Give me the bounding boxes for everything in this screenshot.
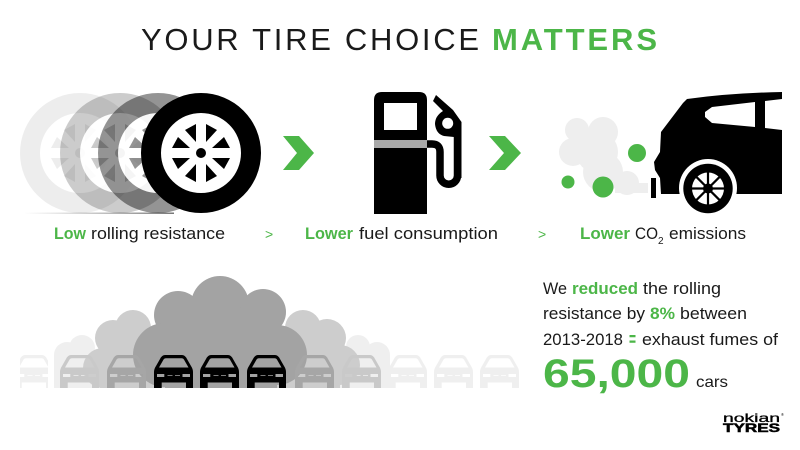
chart: emission clouds and cars xyxy=(14,276,519,389)
separator one: > xyxy=(265,226,273,242)
text block: reduction statement: = xyxy=(629,329,636,351)
logo: nokian tyres xyxy=(723,411,784,435)
label: low rolling resistance: Low xyxy=(54,224,87,243)
text block: reduction statement: exhaust fumes of xyxy=(642,330,778,349)
text block: reduction statement: We xyxy=(543,279,567,298)
icon: CO2 particles xyxy=(562,144,646,198)
text block: reduction statement: 8% xyxy=(650,304,675,323)
cars row xyxy=(14,355,519,388)
arrow: chevron one xyxy=(283,136,314,170)
label: lower CO2 emissions: Lower xyxy=(580,224,630,243)
label: lower CO2 emissions: 2 xyxy=(658,236,664,247)
separator two: > xyxy=(538,226,546,242)
big number: 65,000 xyxy=(543,352,690,396)
icon: exhaust smoke xyxy=(559,117,648,195)
logo: nokian tyres: nokian xyxy=(723,411,780,425)
big number: cars xyxy=(696,374,728,391)
text block: reduction statement: the rolling xyxy=(643,279,721,298)
arrow: chevron two xyxy=(489,136,521,170)
title: YOUR TIRE CHOICE xyxy=(141,22,479,57)
label: lower fuel consumption xyxy=(305,224,498,243)
icon: car rear xyxy=(651,92,782,219)
label: lower fuel consumption: Lower xyxy=(305,224,353,243)
label: low rolling resistance: rolling resistance xyxy=(91,224,225,243)
label: lower fuel consumption: fuel consumption xyxy=(359,224,498,243)
text block: reduction statement: reduced xyxy=(572,279,638,298)
logo: nokian tyres: ® xyxy=(781,412,784,417)
title: MATTERS xyxy=(492,22,657,57)
cloud: dark xyxy=(133,276,307,389)
label: lower CO2 emissions xyxy=(580,224,746,247)
cloud: medium xyxy=(83,310,360,389)
label: lower CO2 emissions: emissions xyxy=(669,224,746,243)
logo: nokian tyres: TYRES xyxy=(723,423,780,435)
text block: reduction statement xyxy=(543,279,778,351)
big number xyxy=(543,352,728,396)
title xyxy=(141,22,657,57)
label: lower CO2 emissions: CO xyxy=(635,224,658,243)
text block: reduction statement: between xyxy=(680,304,747,323)
cloud: light xyxy=(54,335,390,389)
icon: fading tires xyxy=(20,93,261,214)
icon: fuel pump xyxy=(374,92,462,214)
text block: reduction statement: resistance by xyxy=(543,304,645,323)
text block: reduction statement: 2013-2018 xyxy=(543,330,623,349)
